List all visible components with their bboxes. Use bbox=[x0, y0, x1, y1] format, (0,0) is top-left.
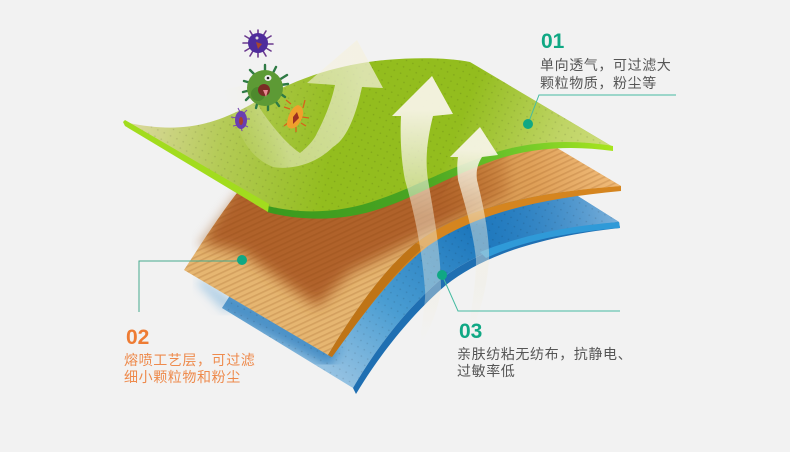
description 01: 单向透气，可过滤大 bbox=[540, 57, 671, 73]
description 01: 颗粒物质，粉尘等 bbox=[540, 75, 657, 91]
description 03: 过敏率低 bbox=[457, 363, 515, 379]
callout 02 bbox=[124, 255, 255, 385]
icon: orange virus right bbox=[284, 100, 309, 132]
arrow: short right bbox=[450, 127, 498, 342]
description 02: 细小颗粒物和粉尘 bbox=[124, 369, 241, 385]
layer 3: blue non-woven fabric bbox=[197, 185, 620, 394]
callout 01 bbox=[523, 30, 676, 129]
icon: green virus centre bbox=[243, 65, 288, 110]
leader line 01 bbox=[528, 95, 676, 124]
arrow: curved hook bbox=[222, 40, 383, 168]
layer 2: orange melt-blown layer bbox=[184, 148, 621, 357]
number 01: 01 bbox=[541, 30, 565, 53]
leader line 03 bbox=[442, 275, 620, 311]
marker dot 03 bbox=[437, 270, 447, 280]
icon: purple virus left bbox=[231, 108, 250, 131]
description 02: 熔喷工艺层，可过滤 bbox=[124, 352, 255, 368]
marker dot 02 bbox=[237, 255, 247, 265]
leader line 02 bbox=[139, 261, 242, 312]
description 03: 亲肤纺粘无纺布，抗静电、 bbox=[457, 346, 632, 362]
green layer left edge bbox=[123, 120, 269, 212]
number 02: 02 bbox=[126, 326, 149, 349]
green layer front edge bbox=[267, 142, 613, 219]
arrow: tall centre bbox=[392, 76, 453, 345]
callout 03 bbox=[437, 270, 632, 379]
layer 1: green top layer bbox=[123, 58, 613, 219]
marker dot 01 bbox=[523, 119, 533, 129]
icon: purple virus top bbox=[243, 30, 273, 57]
number 03: 03 bbox=[459, 320, 482, 343]
